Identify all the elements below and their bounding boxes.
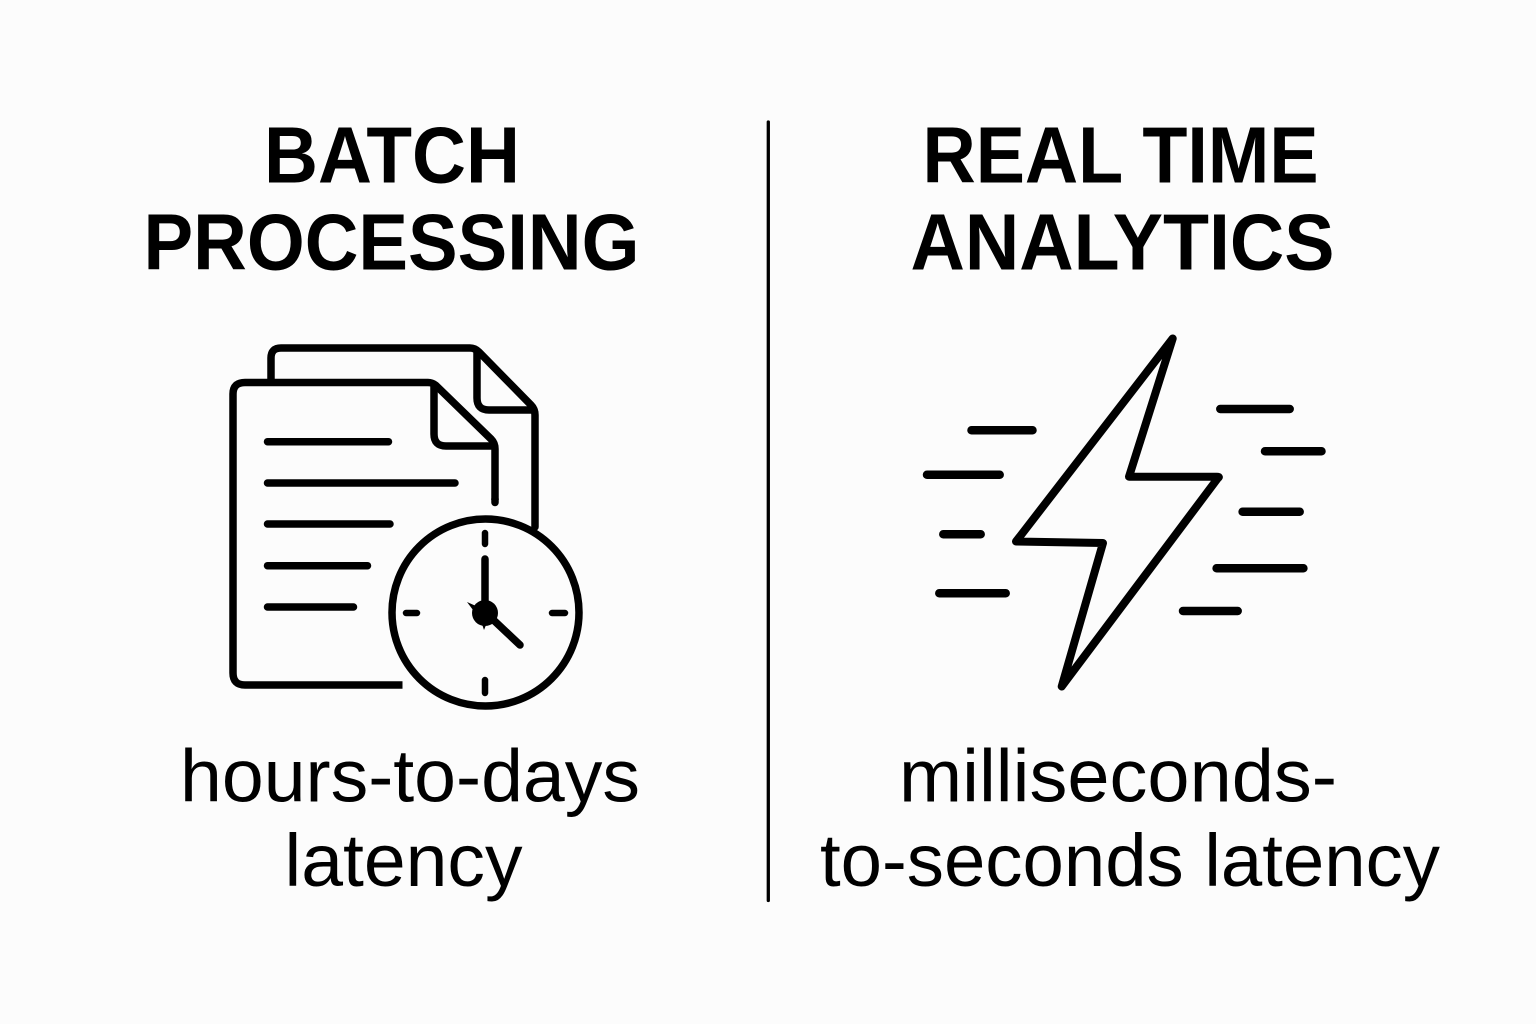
caption: hours-to-days latency: hours-to-days bbox=[180, 735, 640, 818]
heading: real time analytics: REAL TIME bbox=[922, 111, 1318, 200]
heading: real time analytics bbox=[910, 111, 1334, 287]
icon: documents with clock bbox=[233, 348, 579, 706]
center divider bbox=[767, 122, 770, 900]
heading: batch processing bbox=[144, 111, 640, 287]
caption: hours-to-days latency: latency bbox=[284, 819, 522, 902]
heading: batch processing: BATCH bbox=[264, 111, 520, 200]
panel: real time analytics bbox=[820, 111, 1440, 902]
icon: lightning bolt with speed lines bbox=[927, 338, 1322, 686]
caption: milliseconds-to-seconds latency: to-seconds latency bbox=[820, 819, 1440, 902]
heading: batch processing: PROCESSING bbox=[144, 198, 640, 287]
panel: batch processing bbox=[144, 111, 640, 902]
heading: real time analytics: ANALYTICS bbox=[910, 198, 1334, 287]
caption: hours-to-days latency bbox=[180, 735, 640, 902]
caption: milliseconds-to-seconds latency: milliseconds- bbox=[899, 735, 1337, 818]
caption: milliseconds-to-seconds latency bbox=[820, 735, 1440, 902]
